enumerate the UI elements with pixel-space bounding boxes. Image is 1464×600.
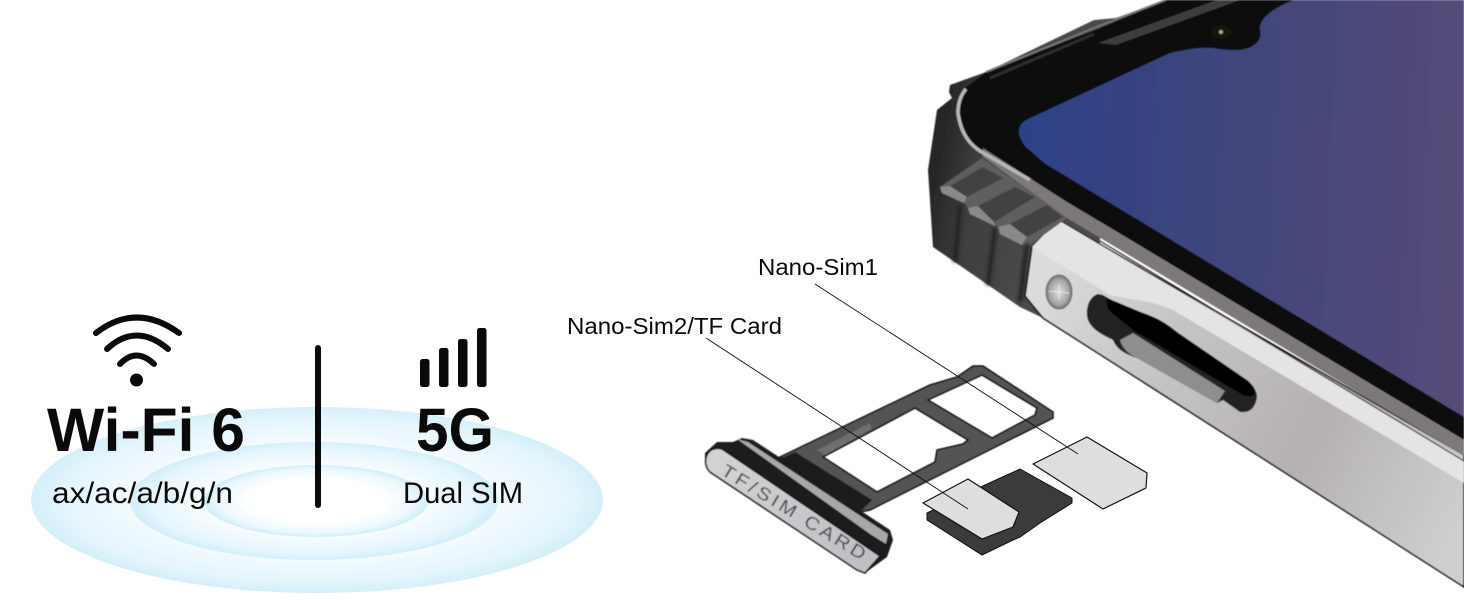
signal ripple rings xyxy=(31,407,603,593)
heading: 5G: 5G xyxy=(416,396,494,464)
phone top trim xyxy=(986,0,1166,78)
bumper ridges xyxy=(940,158,1067,245)
tray cap label: TF/SIM CARD xyxy=(718,461,869,564)
leader line: Nano-Sim2/TF Card xyxy=(706,338,968,509)
tray cap xyxy=(705,438,893,573)
phone speaker slit xyxy=(1098,0,1240,45)
tray frame xyxy=(780,366,1053,512)
bumper grooves xyxy=(955,205,1027,302)
text: wifi standards: ax/ac/a/b/g/n xyxy=(52,477,233,510)
tray dark base xyxy=(782,452,872,512)
icon: wifi xyxy=(96,318,179,386)
phone corner xyxy=(928,0,1464,587)
SIM slot xyxy=(1087,294,1257,412)
phone silver side xyxy=(1025,220,1464,587)
silver side screw xyxy=(1046,275,1072,309)
divider xyxy=(315,345,321,508)
phone front camera xyxy=(1211,25,1231,39)
heading: Wi-Fi 6: Wi-Fi 6 xyxy=(47,396,245,464)
phone black bezel xyxy=(958,0,1464,440)
text: Dual SIM: Dual SIM xyxy=(403,477,523,510)
icon: signal bars xyxy=(420,328,486,387)
SIM tray xyxy=(705,366,1053,573)
label: Nano-Sim1: Nano-Sim1 xyxy=(758,254,878,280)
nano SIM 2 card xyxy=(923,479,1019,539)
tray highlight streak xyxy=(817,423,872,455)
microSD card xyxy=(927,469,1072,555)
phone screen xyxy=(1019,0,1464,417)
leader line: Nano-Sim1 xyxy=(815,284,1078,454)
phone rubber bumper xyxy=(928,0,1200,340)
nano SIM 1 card xyxy=(1033,437,1147,509)
label: Nano-Sim2/TF Card: Nano-Sim2/TF Card xyxy=(567,313,782,339)
phone metal frame band xyxy=(958,89,1464,461)
